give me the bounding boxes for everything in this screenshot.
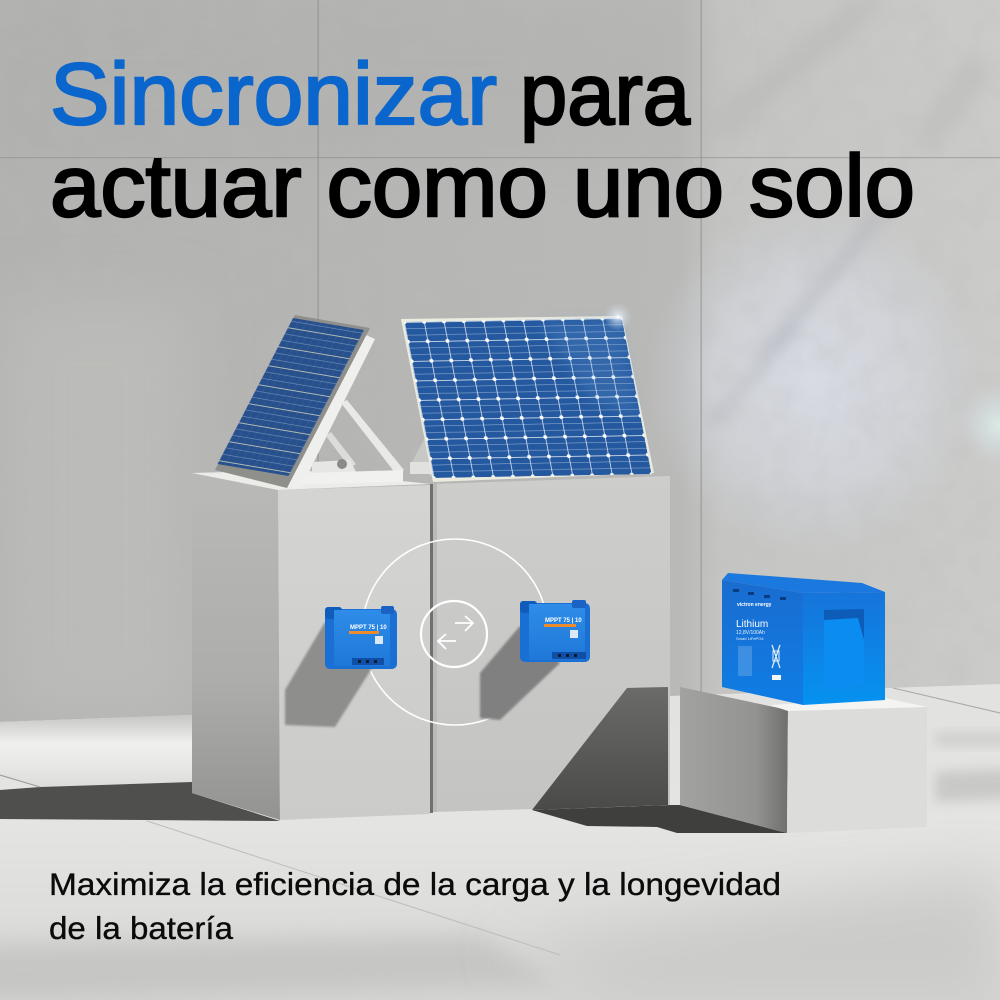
floor bbox=[0, 684, 1000, 1000]
battery: Smart LiFePO4 bbox=[736, 636, 764, 641]
title: para bbox=[520, 46, 691, 143]
charge controller: right bbox=[520, 600, 590, 662]
controller shadows bbox=[285, 622, 560, 727]
title: actuar como uno solo bbox=[50, 138, 915, 235]
charge controller: left bbox=[325, 606, 397, 669]
pedestal: battery block bbox=[680, 687, 927, 833]
caption: Maximiza la eficiencia de la carga y la longevidad bbox=[49, 866, 781, 902]
background: concrete wall bbox=[0, 0, 1000, 730]
battery: Lithium bbox=[736, 619, 768, 630]
title bbox=[50, 46, 915, 235]
connection circle bbox=[362, 539, 548, 725]
charge controller: right: MPPT 75 | 10 bbox=[545, 618, 582, 624]
sync icon: two-way arrows bbox=[421, 601, 487, 667]
pedestal: left block bbox=[192, 470, 430, 820]
title: Sincronizar bbox=[50, 46, 497, 143]
caption bbox=[49, 866, 781, 946]
battery bbox=[722, 573, 885, 705]
battery: 12,8V/100Ah bbox=[736, 630, 765, 636]
charge controller: left: MPPT 75 | 10 bbox=[350, 625, 387, 631]
panel: tilted left solar panel with stand bbox=[215, 315, 404, 488]
battery: victron energy bbox=[737, 602, 772, 608]
pedestal: right block bbox=[430, 476, 670, 813]
panel: large right solar panel bbox=[401, 303, 654, 482]
caption: de la batería bbox=[49, 910, 233, 946]
